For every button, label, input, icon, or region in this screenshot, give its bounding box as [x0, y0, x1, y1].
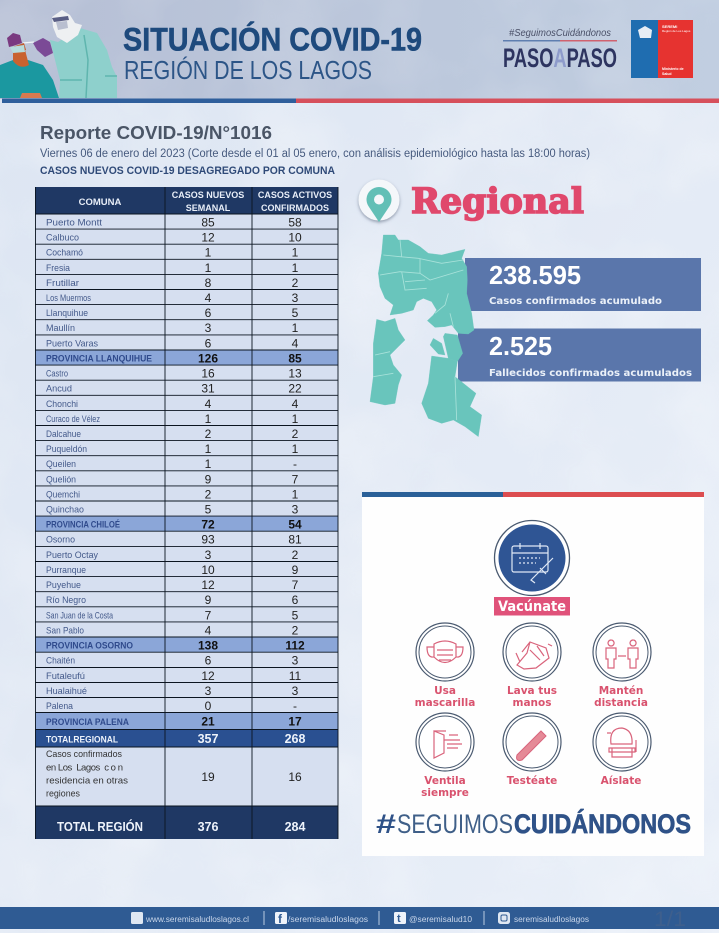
row: Cochamó: 1 [205, 246, 212, 260]
row: Frutillar: 8 [205, 276, 212, 290]
row: Cochamó: 1 [292, 246, 299, 260]
row: Provincia Osorno [35, 637, 338, 652]
row: Dalcahue: Dalcahue [46, 429, 81, 440]
row: Quinchao [35, 501, 338, 516]
row: cases from other regions: 16 [288, 770, 302, 784]
row: Quinchao: 3 [292, 502, 299, 516]
row: Quemchi: 1 [292, 487, 299, 501]
row: Total Región: TOTAL REGIÓN [57, 819, 143, 834]
stat: confirmed cases: 238.595 [489, 260, 581, 290]
row: Provincia Palena: PROVINCIA PALENA [46, 717, 129, 728]
report date line: Viernes 06 de enero del 2023 (Corte desde el 01 al 05 enero, con análisis epidemiológico hasta las 18:00 horas) [40, 148, 590, 160]
row: San Pablo: 2 [292, 623, 299, 637]
row: Puyehue: 12 [201, 578, 215, 592]
row: Ancud: 31 [201, 382, 215, 396]
row: Palena [35, 698, 338, 713]
label: Aíslate: Aíslate [601, 775, 641, 787]
label: Mantén distancia [594, 685, 648, 709]
row: Provincia Llanquihue [35, 350, 338, 366]
row: Provincia Osorno: PROVINCIA OSORNO [46, 640, 133, 652]
hashtag [376, 808, 691, 839]
panel: prevention measures [362, 492, 704, 856]
label: Usa mascarilla: mascarilla [415, 697, 475, 709]
row: Purranque: 9 [292, 563, 299, 577]
row: Fresia: 1 [292, 261, 299, 275]
footer: twitter: t [397, 913, 401, 925]
icon: mask [416, 623, 474, 681]
row: Chonchi: 4 [205, 397, 212, 411]
row: Quemchi: Quemchi [46, 489, 80, 500]
row: San Juan de la Costa: 5 [292, 608, 299, 622]
row: San Juan de la Costa: 7 [205, 608, 212, 622]
row: Llanquihue: 5 [292, 306, 299, 320]
row: Los Muermos: 4 [205, 291, 212, 305]
row: Cochamó: Cochamó [46, 248, 83, 259]
row: Hualaihué: Hualaihué [46, 686, 87, 697]
stat: confirmed deaths: 2.525 [489, 331, 552, 361]
row: Quinchao: Quinchao [46, 504, 84, 516]
row: Total Regional: 268 [285, 732, 305, 746]
logo: Seremi Ministerio de Salud [631, 20, 693, 78]
row: Chaitén: 3 [292, 654, 299, 668]
label: Testéate: Testéate [507, 775, 557, 787]
row: San Pablo: San Pablo [46, 625, 84, 636]
row: Cochamó [35, 244, 338, 260]
footer bar [0, 907, 719, 931]
row: Maullín [35, 320, 338, 335]
stat: confirmed deaths [458, 328, 701, 382]
label: Ventila siempre: Ventila [424, 775, 466, 787]
row: Calbuco: Calbuco [46, 233, 79, 244]
row: Total Región: 284 [285, 820, 305, 834]
row: Hualaihué: 3 [292, 684, 299, 698]
table header row: COMUNA [79, 197, 122, 208]
row: Total Regional [35, 730, 338, 747]
row: Puerto Octay: 2 [292, 548, 299, 562]
table heading: CASOS NUEVOS COVID-19 DESAGREGADO POR COMUNA [40, 165, 335, 177]
stat: confirmed deaths: Fallecidos confirmados acumulados [489, 368, 692, 379]
row: cases from other regions: Casos confirmados [46, 749, 122, 760]
row: Provincia Osorno: 112 [285, 638, 305, 652]
row: Provincia Palena: 21 [201, 714, 215, 728]
row: Curaco de Vélez [35, 410, 338, 426]
row: Provincia Chiloé [35, 516, 338, 532]
row: Quemchi [35, 486, 338, 501]
label: Ventila siempre [421, 775, 469, 799]
row: Puerto Varas [35, 335, 338, 350]
row: Dalcahue: 2 [205, 427, 212, 441]
row: Llanquihue [35, 305, 338, 320]
header band [0, 0, 719, 99]
table header row: SEMANAL [186, 203, 231, 213]
row: Castro: Castro [46, 369, 68, 380]
row: Castro: 13 [288, 367, 302, 381]
row: Chaitén [35, 652, 338, 668]
row: San Pablo [35, 622, 338, 637]
map: Región de Los Lagos [370, 235, 482, 437]
row: Puerto Varas: 6 [205, 336, 212, 350]
row: Purranque: 10 [201, 563, 215, 577]
row: Provincia Palena [35, 712, 338, 730]
row: Quelión: 9 [205, 472, 212, 486]
row: Osorno [35, 531, 338, 547]
logo: Seremi Ministerio de Salud: Salud [662, 72, 672, 76]
row: Curaco de Vélez: Curaco de Vélez [46, 414, 100, 425]
header divider bar [2, 98, 719, 103]
row: San Juan de la Costa [35, 607, 338, 622]
subtitle: REGIÓN DE LOS LAGOS [124, 55, 372, 85]
logo: Seremi Ministerio de Salud: SEREMI [662, 24, 677, 29]
row: Curaco de Vélez: 1 [292, 412, 299, 426]
row: Fresia [35, 259, 338, 275]
row: Río Negro: Río Negro [46, 595, 86, 606]
row: cases from other regions: 19 [201, 770, 215, 784]
footer: website [131, 912, 249, 924]
icon: isolate [593, 713, 651, 771]
hashtag: # [376, 809, 396, 839]
footer: facebook: /seremisaludloslagos [288, 915, 368, 924]
row: Palena: 0 [205, 699, 212, 713]
row: Quemchi: 2 [205, 487, 212, 501]
title: SITUACIÓN COVID-19 [123, 20, 422, 58]
row: Futaleufú [35, 668, 338, 683]
label: Lava tus manos [507, 685, 557, 709]
row: Osorno: 81 [288, 533, 302, 547]
label: Ventila siempre: siempre [421, 787, 469, 799]
row: Puyehue: Puyehue [46, 580, 81, 591]
footer: facebook: f [278, 912, 283, 926]
row: Ancud: 22 [288, 382, 302, 396]
row: Río Negro [35, 592, 338, 607]
row: Osorno: 93 [201, 533, 215, 547]
footer: twitter [394, 912, 473, 925]
row: Chaitén: 6 [205, 654, 212, 668]
row: Quelión [35, 471, 338, 486]
row: Fresia: Fresia [46, 263, 71, 274]
logo: Paso a Paso: #SeguimosCuidándonos [509, 27, 612, 39]
row: Puerto Montt: 58 [288, 216, 302, 230]
row: Castro: 16 [201, 367, 215, 381]
icon: hand washing [503, 623, 561, 681]
row: Llanquihue: Llanquihue [46, 308, 88, 319]
label: Mantén distancia: Mantén [599, 685, 643, 697]
row: Provincia Chiloé: PROVINCIA CHILOÉ [46, 520, 120, 531]
row: Futaleufú: 12 [201, 669, 215, 683]
icon: test tube [503, 713, 561, 771]
icon: ventilate [416, 713, 474, 771]
page number: 1/1 [654, 908, 686, 931]
logo: Seremi Ministerio de Salud: Ministerio de [662, 67, 684, 71]
hashtag: CUIDÁNDONOS [514, 808, 691, 839]
row: Puyehue [35, 577, 338, 592]
row: Queilen: Queilen [46, 459, 76, 470]
row: Frutillar [35, 274, 338, 290]
table: cases by commune [35, 187, 338, 839]
row: Puyehue: 7 [292, 578, 299, 592]
row: Los Muermos [35, 290, 338, 305]
row: San Pablo: 4 [205, 623, 212, 637]
row: Puerto Varas: Puerto Varas [46, 338, 98, 349]
label: Mantén distancia: distancia [594, 697, 648, 709]
logo: Paso a Paso: PASOAPASO [503, 43, 617, 73]
row: San Juan de la Costa: San Juan de la Costa [46, 610, 114, 621]
row: cases from other regions [35, 747, 338, 806]
row: Provincia Llanquihue: 126 [198, 352, 218, 366]
stat: confirmed cases [465, 258, 701, 311]
row: Calbuco: 10 [288, 231, 302, 245]
footer: website: www.seremisaludloslagos.cl [145, 915, 249, 924]
row: Quelión: Quelión [46, 474, 76, 485]
row: Purranque: Purranque [46, 565, 86, 576]
row: Llanquihue: 6 [205, 306, 212, 320]
row: Futaleufú: Futaleufú [46, 671, 85, 682]
icon: location pin [358, 180, 400, 222]
row: cases from other regions: residencia en otras [46, 776, 128, 786]
row: Ancud: Ancud [46, 384, 72, 395]
icon: keep distance [593, 623, 651, 681]
row: Chaitén: Chaitén [46, 656, 75, 667]
row: Dalcahue: 2 [292, 427, 299, 441]
report heading: Reporte COVID-19/N°1016 [40, 123, 272, 143]
icon: vaccine calendar [494, 520, 570, 596]
row: Hualaihué [35, 682, 338, 698]
row: Dalcahue [35, 426, 338, 441]
table header row: CASOS NUEVOS [172, 190, 244, 200]
row: Castro [35, 365, 338, 381]
row: Maullín: Maullín [46, 323, 75, 334]
row: Maullín: 3 [205, 321, 212, 335]
hashtag: SEGUIMOS [397, 809, 513, 839]
row: Puqueldón [35, 441, 338, 456]
row: Puerto Varas: 4 [292, 336, 299, 350]
row: Calbuco [35, 229, 338, 245]
row: Chonchi: 4 [292, 397, 299, 411]
label: Vacúnate: Vacúnate [498, 599, 566, 615]
row: Frutillar: Frutillar [46, 278, 79, 289]
row: Puerto Montt: 85 [201, 216, 215, 230]
row: Osorno: Osorno [46, 535, 75, 546]
row: Fresia: 1 [205, 261, 212, 275]
row: Frutillar: 2 [292, 276, 299, 290]
row: Total Región [35, 806, 338, 839]
row: Ancud [35, 380, 338, 396]
label: Lava tus manos: Lava tus [507, 685, 557, 697]
row: Quinchao: 5 [205, 502, 212, 516]
row: Futaleufú: 11 [289, 669, 302, 683]
row: Maullín: 1 [292, 321, 299, 335]
row: Río Negro: 6 [292, 593, 299, 607]
logo: Seremi Ministerio de Salud: Región de Los Lagos [662, 29, 691, 33]
row: Provincia Llanquihue: PROVINCIA LLANQUIHUE [46, 354, 152, 364]
label: Usa mascarilla: Usa [434, 685, 456, 697]
row: Purranque [35, 562, 338, 577]
row: Puqueldón: 1 [292, 442, 299, 456]
row: Puerto Octay: Puerto Octay [46, 550, 98, 561]
illustration: health workers [0, 10, 117, 98]
row: Puerto Montt: Puerto Montt [46, 218, 102, 228]
row: cases from other regions: en Los Lagos c o n [46, 762, 123, 774]
row: Queilen: 1 [205, 457, 212, 471]
logo: Paso a Paso [503, 27, 617, 73]
row: Puerto Octay [35, 546, 338, 562]
row: Puerto Montt [35, 214, 338, 230]
table header row: CASOS ACTIVOS [258, 190, 332, 200]
row: Total Región: 376 [198, 820, 218, 834]
row: Palena: Palena [46, 701, 74, 712]
row: Puqueldón: 1 [205, 442, 212, 456]
table header row [35, 187, 338, 214]
label: Lava tus manos: manos [513, 697, 551, 709]
footer: facebook [275, 912, 368, 926]
row: Puerto Octay: 3 [205, 548, 212, 562]
row: Curaco de Vélez: 1 [205, 412, 212, 426]
table header row: CONFIRMADOS [261, 203, 329, 213]
row: Total Regional: 357 [198, 732, 218, 746]
row: Total Regional: TOTALREGIONAL [46, 734, 118, 746]
row: Chonchi: Chonchi [46, 399, 78, 410]
row: cases from other regions: regiones [46, 788, 80, 800]
row: Palena: - [293, 699, 297, 713]
row: Puqueldón: Puqueldón [46, 444, 87, 455]
label: Usa mascarilla [415, 685, 475, 709]
row: Quelión: 7 [292, 472, 299, 486]
row: Hualaihué: 3 [205, 684, 212, 698]
row: Queilen [35, 456, 338, 471]
footer: instagram [498, 912, 589, 924]
row: Río Negro: 9 [205, 593, 212, 607]
row: Queilen: - [293, 457, 297, 471]
row: Provincia Chiloé: 72 [201, 518, 215, 532]
row: Provincia Palena: 17 [288, 714, 302, 728]
row: Calbuco: 12 [201, 231, 215, 245]
row: Provincia Osorno: 138 [198, 638, 218, 652]
row: Los Muermos: Los Muermos [46, 293, 91, 304]
footer: instagram: seremisaludloslagos [514, 915, 589, 924]
heading: Regional: Regional [411, 181, 584, 222]
row: Provincia Chiloé: 54 [288, 518, 302, 532]
row: Los Muermos: 3 [292, 291, 299, 305]
row: Chonchi [35, 395, 338, 411]
footer: twitter: @seremisalud10 [409, 915, 473, 924]
stat: confirmed cases: Casos confirmados acumulado [489, 296, 662, 307]
row: Provincia Llanquihue: 85 [288, 352, 302, 366]
